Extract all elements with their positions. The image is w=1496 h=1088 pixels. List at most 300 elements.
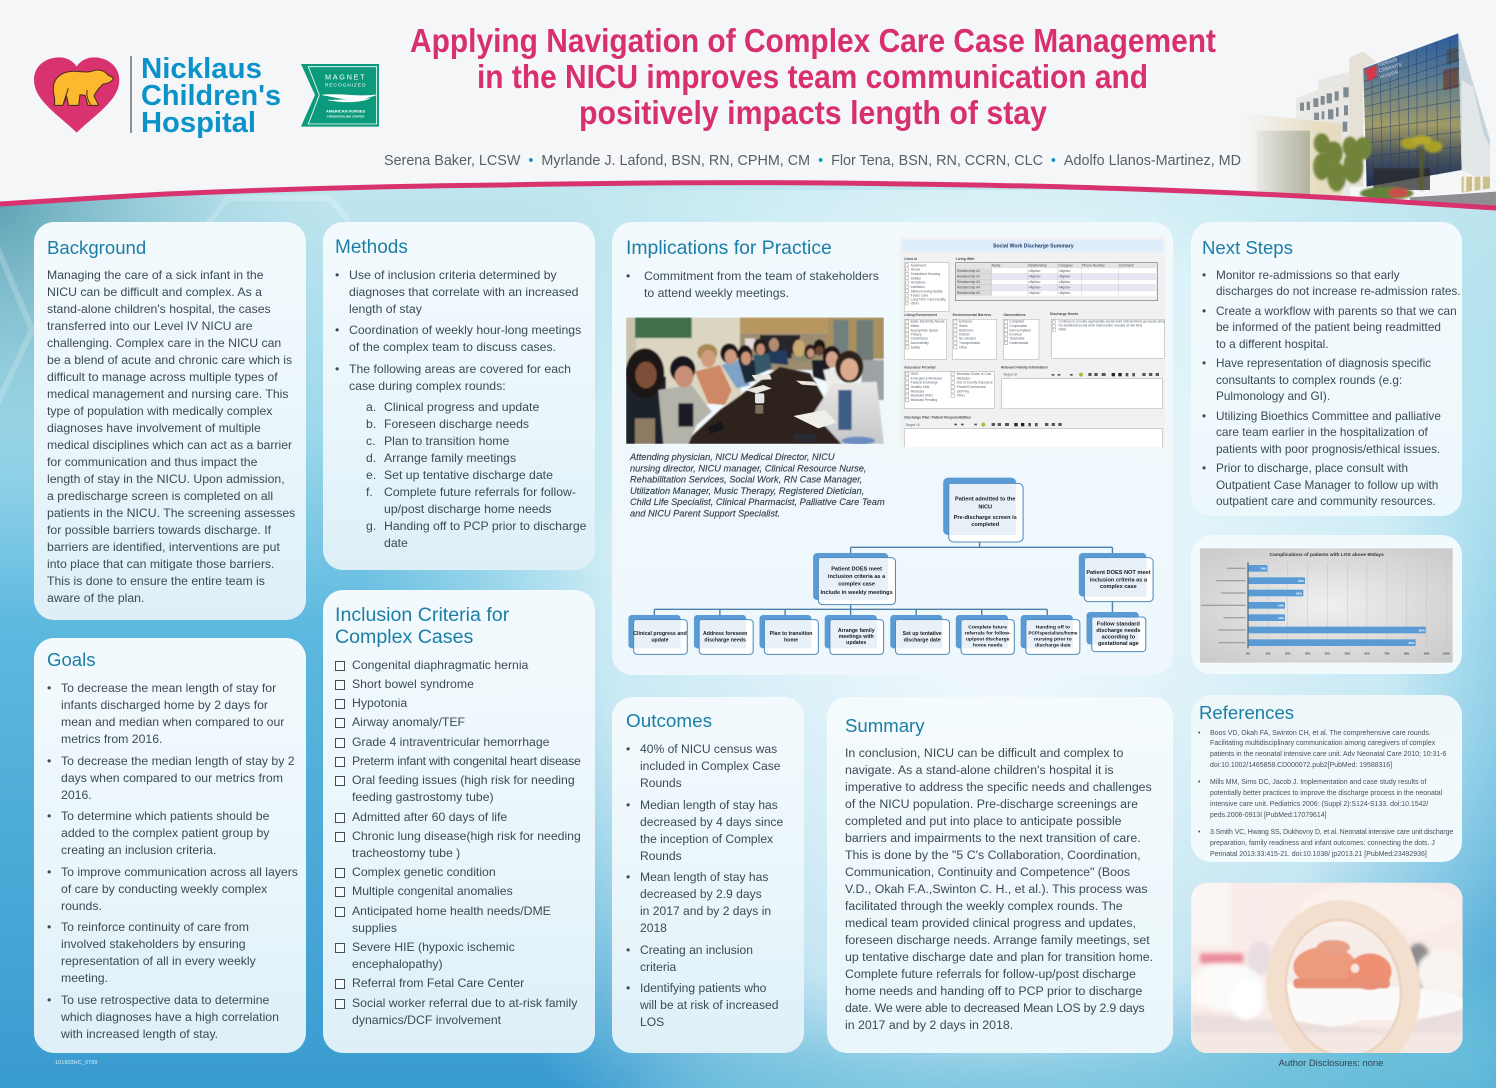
list: methods: c. (366, 434, 376, 448)
checklist: inclusion criteria: Referral from Fetal Care Center (352, 976, 524, 990)
list: next steps: Pulmonology and GI). (1216, 389, 1330, 403)
box: patient admitted: NICU (978, 505, 992, 511)
box: transition home: Plan to transition (770, 631, 812, 637)
screenshot: social work discharge summary form: Transportation (959, 341, 980, 345)
list: references: • (1198, 779, 1200, 786)
list: goals: metrics from 2016. (61, 732, 162, 746)
screenshot: social work discharge summary form: Comment (1119, 264, 1133, 268)
text block: summary: foreseen discharge needs. Arrange family meetings, set (845, 932, 1150, 946)
heading: inclusion criteria (335, 604, 509, 648)
list: next steps: Prior to discharge, place consult with (1216, 461, 1408, 475)
list: goals: To determine which patients should be (61, 809, 269, 823)
photo: team meeting (626, 317, 884, 445)
list: outcomes: Mean length of stay has (640, 870, 768, 884)
list: next steps: Have representation of diagnosis specific (1216, 356, 1431, 370)
box: discharge needs: Address foreseen (703, 631, 747, 637)
caption: team members: Utilization Manager, Music Therapy, Registered Dietician, (630, 486, 864, 496)
screenshot: social work discharge summary form: Relevant Family Information (1001, 366, 1048, 370)
screenshot: social work discharge summary form: <Alpha> (1028, 280, 1041, 284)
bar chart: complications of patients with LOS above 90 days: 70% (1384, 651, 1390, 655)
list: next steps: Outpatient Case Manager to follow up with (1216, 478, 1438, 492)
screenshot: social work discharge summary form: Medicaid HMO (911, 394, 933, 398)
box: meets criteria (813, 553, 895, 605)
screenshot: social work discharge summary form: Cooperative (1009, 324, 1027, 328)
authors: Serena Baker, LCSW • Myrlande J. Lafond, BSN, RN, CPHM, CM • Flor Tena, BSN, RN, CCRN, CLC • Adolfo Llanos-Martinez, MD (384, 152, 1241, 169)
box: future referrals: referrals for follow- (965, 631, 1011, 637)
bar chart: complications of patients with LOS above 90 days: 100% (1443, 651, 1450, 655)
list: methods: date (384, 536, 408, 550)
screenshot: social work discharge summary form: Shelter (911, 276, 922, 280)
text block: background: stand-alone children's hospital, the cases (47, 302, 271, 316)
screenshot: social work discharge summary form: <Alpha> (1058, 286, 1071, 290)
bar chart: complications of patients with LOS above 90 days: 0% (1246, 651, 1251, 655)
text block: summary: date. We were able to decreased Mean LOS by 2.9 days (845, 1000, 1145, 1014)
list: outcomes: Identifying patients who (640, 981, 766, 995)
list: implications: • (626, 268, 630, 282)
list: next steps: discharges do not increase re-admission rates. (1216, 284, 1461, 298)
list: methods: g. (366, 519, 376, 533)
screenshot: social work discharge summary form: <Alpha> (1028, 275, 1041, 279)
logo: Nicklaus Children's Hospital: Hospital (141, 107, 256, 139)
box: discharge needs (694, 615, 753, 654)
text block: summary: Complete future referrals for follow-up/post discharge (845, 966, 1136, 980)
logo: Nicklaus Children's Hospital: Nicklaus (141, 53, 262, 85)
header curve (0, 183, 1496, 208)
box: patient admitted: Patient admitted to the (955, 497, 1015, 503)
list: references: intensive care unit. Pediatrics 2006: (Suppl 2):S124-S133. doi:10.1542/ (1210, 801, 1428, 808)
list: goals: To improve communication across all layers (61, 865, 298, 879)
panel: background (34, 222, 306, 620)
screenshot: social work discharge summary form: Kitchen (959, 332, 970, 336)
box: meets criteria: Patient DOES meet (831, 567, 882, 573)
heading: references: References (1199, 702, 1294, 723)
heading: summary: Summary (845, 715, 925, 736)
box: future referrals (956, 615, 1014, 654)
screenshot: social work discharge summary form: <Alpha> (1058, 291, 1071, 295)
list: goals: of care by conducting weekly complex (61, 882, 267, 896)
list: references: doi:10.1002/1465858.CD000072.pub2[PubMed: 19588316] (1210, 762, 1392, 769)
screenshot: social work discharge summary form: Phone Number (1082, 264, 1106, 268)
list: goals: representation of all in every weekly (61, 954, 256, 968)
list: goals: creating an inclusion criteria. (61, 843, 216, 857)
list: goals: meeting. (61, 971, 108, 985)
bar chart: complications of patients with LOS above 90 days: 19% (1278, 604, 1284, 608)
list: goals: infants discharged home by 2 days for (61, 698, 268, 712)
list: goals: • (47, 809, 51, 823)
title: in the NICU improves team communication and (477, 58, 1148, 95)
text block: background: into place that can mitigate those barriers. (47, 556, 274, 570)
text block: summary: This is done by the "5 C's Collaboration, Coordination, (845, 848, 1141, 862)
screenshot: social work discharge summary form: Medicaid Share of Cost (957, 372, 991, 376)
bar chart: complications of patients with LOS above 90 days: 50% (1345, 651, 1351, 655)
box: transition home: home (784, 637, 798, 643)
list: goals: with increased length of stay. (61, 1027, 218, 1041)
list: methods: Use of inclusion criteria determined by (349, 268, 557, 282)
screenshot: social work discharge summary form: Safety (911, 345, 920, 349)
panel: references (1191, 695, 1462, 862)
checklist: inclusion criteria: tracheostomy tube ) (352, 846, 460, 860)
header band (0, 0, 1496, 210)
box: standard discharge (1087, 612, 1146, 652)
list: goals: days when compared to our metrics from (61, 770, 283, 784)
box: handing off: nursing prior to (1034, 637, 1072, 643)
text block: summary: imperative to address the specific needs and challenges (845, 780, 1152, 794)
text block: background: a predischarge screen is completed on all (47, 488, 273, 502)
checklist: inclusion criteria: Preterm infant with congenital heart disease (352, 754, 581, 768)
list: methods: up/post discharge home needs (384, 502, 552, 516)
caption: team members: and NICU Parent Support Specialist. (630, 508, 780, 518)
list: outcomes: will be at risk of increased (640, 998, 778, 1012)
list: goals: rounds. (61, 899, 102, 913)
list: methods: • (335, 362, 339, 376)
text block: background (47, 268, 295, 604)
bar chart: complications of patients with LOS above 90 days: 30% (1305, 651, 1311, 655)
hospital building photo: Hospital (1379, 69, 1399, 81)
list: methods: a. (366, 400, 376, 414)
text block: summary: medical team provided clinical progress and updates, (845, 916, 1136, 930)
box: meets criteria: complex case (838, 581, 875, 587)
list: implications (626, 268, 879, 300)
heading: background: Background (47, 237, 146, 258)
checklist: inclusion criteria: Multiple congenital anomalies (352, 884, 513, 898)
screenshot: social work discharge summary form: Relationship #2 (957, 275, 980, 279)
text block: summary: facilitated through the weekly complex rounds. The (845, 898, 1123, 912)
screenshot: social work discharge summary form: Apartment (911, 263, 926, 267)
list: outcomes: included in Complex Case (640, 758, 780, 772)
list: outcomes: 2018 (640, 921, 667, 935)
photo: infant in incubator (1191, 882, 1463, 1053)
footer code: 101903HC_0799 (55, 1060, 97, 1066)
list: next steps: • (1202, 408, 1206, 422)
screenshot: social work discharge summary form: Non-compliant (1009, 328, 1031, 332)
list: methods: diagnoses that correlate with an increased (349, 284, 578, 298)
screenshot: social work discharge summary form: Out of County Insurance (957, 381, 993, 385)
list: outcomes (626, 742, 783, 1029)
text block: background: transferred into our Level IV NICU are (47, 318, 253, 332)
panel: inclusion criteria (323, 590, 595, 1053)
title: positively impacts length of stay (579, 94, 1048, 131)
screenshot: social work discharge summary form: <Alpha> (1058, 269, 1071, 273)
graphics: implications (626, 238, 1165, 655)
box: family meetings: updates (846, 640, 866, 646)
box: discharge needs: discharge needs (704, 637, 746, 643)
text block: background: type of population with medically complex (47, 404, 272, 418)
list: next steps: Utilizing Bioethics Committee and palliative (1216, 408, 1441, 422)
screenshot: social work discharge summary form: Relationship #3 (957, 280, 980, 284)
list: outcomes: decreased by 2.9 days (640, 887, 762, 901)
list: next steps: be informed of the patient being readmitted (1216, 320, 1441, 334)
list: methods: b. (366, 417, 376, 431)
list: methods: length of stay (349, 302, 422, 316)
screenshot: social work discharge summary form: Foster Care (911, 294, 928, 298)
screenshot: social work discharge summary form: Medicare (957, 376, 970, 380)
hospital building photo: Nicklaus (1377, 57, 1398, 69)
panel: implications for practice (612, 222, 1173, 675)
text block: summary: up tentative discharge date and plan for transition home. (845, 950, 1153, 964)
checklist: inclusion criteria: Chronic lung disease(high risk for needing (352, 829, 581, 843)
list: outcomes: • (626, 981, 630, 995)
list: references (1198, 730, 1453, 858)
screenshot: social work discharge summary form (900, 237, 1165, 449)
list: goals: added to the complex patient group by (61, 826, 269, 840)
screenshot: social work discharge summary form: Name (992, 264, 1001, 268)
list: outcomes: 40% of NICU census was (640, 742, 777, 756)
checklist: inclusion criteria: Congenital diaphragmatic hernia (352, 658, 528, 672)
checklist: inclusion criteria: Airway anomaly/TEF (352, 715, 465, 729)
caption: team members: Child Life Specialist, Clinical Pharmacist, Palliative Care Team (630, 497, 885, 507)
box: family meetings: meetings with (839, 634, 874, 640)
screenshot: social work discharge summary form: <Alpha> (1028, 269, 1041, 273)
list: goals: 2016. (61, 788, 92, 802)
list: goals: • (47, 993, 51, 1007)
screenshot: social work discharge summary form: Social Work Discharge Summary (993, 244, 1074, 250)
box: standard discharge: discharge needs (1096, 628, 1141, 634)
screenshot: social work discharge summary form: Bathroom (959, 328, 974, 332)
list: outcomes: • (626, 943, 630, 957)
list: goals: To use retrospective data to determine (61, 993, 269, 1007)
bar chart: complications of patients with LOS above 90 days (1200, 548, 1453, 663)
checklist: inclusion criteria: Social worker referral due to at-risk family (352, 996, 577, 1010)
screenshot: social work discharge summary form: Compliant (1009, 320, 1024, 324)
author disclosures: Author Disclosures: none (1279, 1057, 1383, 1068)
panel: complications chart (1191, 535, 1462, 674)
checklist: inclusion criteria: encephalopathy) (352, 957, 443, 971)
screenshot: social work discharge summary form: Private/Commercial (957, 385, 986, 389)
box: handing off (1021, 615, 1080, 654)
box: standard discharge: Follow standard (1097, 622, 1140, 628)
list: next steps: Monitor re-admissions so that early (1216, 268, 1400, 282)
heading: goals: Goals (47, 649, 96, 670)
box: does not meet criteria: complex case (1100, 584, 1137, 590)
list: goals: • (47, 865, 51, 879)
logo: Nicklaus Children's Hospital (34, 53, 281, 139)
screenshot: social work discharge summary form: Long Term Care Facility (911, 298, 946, 302)
screenshot: social work discharge summary form: Emergency Medicaid (911, 376, 942, 380)
screenshot: social work discharge summary form: Environmental Barriers (953, 313, 991, 317)
screenshot: social work discharge summary form: Entrance (959, 320, 972, 324)
text block: background: challenging. Complex care in the NICU can (47, 336, 281, 350)
box: meets criteria: Include in weekly meetings (820, 590, 893, 596)
bar chart: complications of patients with LOS above 90 days: 60% (1364, 651, 1370, 655)
list: next steps (1202, 268, 1461, 508)
screenshot: social work discharge summary form: Living Environment (904, 313, 938, 317)
list: methods: f. (366, 485, 373, 499)
box: standard discharge: gestational age (1098, 641, 1139, 647)
box: patient admitted: Pre-discharge screen is (954, 515, 1017, 521)
screenshot: social work discharge summary form: Federal Exchange (911, 381, 938, 385)
checklist: inclusion criteria: Anticipated home health needs/DME (352, 904, 551, 918)
screenshot: social work discharge summary form: Basic Electricity Needs (911, 320, 945, 324)
text block: summary: of the NICU population. Pre-discharge screenings are (845, 796, 1138, 810)
list: next steps: • (1202, 304, 1206, 318)
flowchart: case pathway (628, 478, 1153, 654)
list: references: Mills MM, Sims DC, Jacob J. Implementation and case study results of (1210, 779, 1426, 786)
screenshot: social work discharge summary form: Other (959, 345, 968, 349)
box: patient admitted: completed (971, 522, 999, 528)
box: future referrals: Complete future (968, 625, 1007, 631)
panel: next steps (1191, 222, 1462, 516)
list: next steps: patients with poor prognosis/ethical issues. (1216, 442, 1440, 456)
icon: Magnet recognized badge: RECOGNIZED (325, 83, 366, 89)
screenshot: social work discharge summary form: Insurance Provider (904, 366, 937, 370)
screenshot: social work discharge summary form: Understands (1009, 341, 1029, 345)
screenshot: social work discharge summary form: No elevator (959, 337, 977, 341)
box: transition home (759, 615, 818, 654)
list: outcomes: Creating an inclusion (640, 943, 753, 957)
box: clinical progress: Clinical progress and (633, 631, 687, 637)
panel: summary (827, 697, 1173, 1053)
text block: background: This is done to ensure the entire team is (47, 574, 265, 588)
list: outcomes: criteria (640, 960, 676, 974)
screenshot: social work discharge summary form: House (911, 268, 920, 272)
box: tentative discharge: discharge date (904, 637, 941, 643)
list: methods: Arrange family meetings (384, 451, 516, 465)
list: outcomes: Median length of stay has (640, 798, 778, 812)
panel: goals (34, 638, 306, 1053)
screenshot: social work discharge summary form: Teachable (1009, 337, 1025, 341)
box: does not meet criteria: inclusion criteria as a (1090, 577, 1148, 583)
screenshot: social work discharge summary form: Other (911, 302, 920, 306)
box: does not meet criteria (1079, 553, 1153, 602)
list: references: potentially better practices to improve the discharge process in the neonatal (1210, 790, 1442, 797)
screenshot: social work discharge summary form: Homeless (911, 281, 926, 285)
bar chart: complications of patients with LOS above 90 days: 10% (1260, 567, 1267, 571)
box: handing off: Handing off to (1036, 625, 1070, 631)
text block: background: difficult to manage across multiple types of (47, 370, 278, 384)
heading: methods: Methods (335, 237, 408, 258)
screenshot: social work discharge summary form: Lives In (904, 257, 917, 261)
list: outcomes: the inception of Complex (640, 832, 773, 846)
checklist: inclusion criteria: dynamics/DCF involvement (352, 1013, 501, 1027)
screenshot: social work discharge summary form: Stairs (959, 324, 968, 328)
screenshot: social work discharge summary form: Cleanliness (911, 337, 928, 341)
screenshot: social work discharge summary form: <Alpha> (1058, 275, 1071, 279)
text block: summary (845, 746, 1153, 1032)
screenshot: social work discharge summary form: Discharge Plan: Patient Responsibilities (904, 416, 971, 420)
bar chart: complications of patients with LOS above 90 days: 20% (1285, 651, 1291, 655)
list: next steps: • (1202, 268, 1206, 282)
screenshot: social work discharge summary form: <Alpha> (1058, 280, 1071, 284)
list: methods: Complete future referrals for follow- (384, 485, 576, 499)
screenshot: social work discharge summary form: Involved (1009, 332, 1022, 336)
screenshot: social work discharge summary form: HMO (911, 372, 919, 376)
list: next steps: outpatient care and community resources. (1216, 494, 1436, 508)
screenshot: social work discharge summary form: Self Pay (957, 389, 969, 393)
list: methods: • (335, 268, 339, 282)
screenshot: social work discharge summary form: Relationship #1 (957, 269, 980, 273)
screenshot: social work discharge summary form: Living With (956, 257, 974, 261)
heading: inclusion criteria: Complex Cases (335, 626, 473, 648)
text block: background: for communication and thus impact the (47, 454, 257, 468)
box: tentative discharge (890, 615, 949, 654)
heading: implications: Implications for Practice (626, 237, 832, 259)
list: goals: which diagnoses have a high correlation (61, 1010, 279, 1024)
box: handing off: PCP/specialists/home (1028, 631, 1078, 636)
list: methods: Set up tentative discharge date (384, 468, 553, 482)
checklist: inclusion criteria (335, 658, 581, 1027)
list: goals: To decrease the mean length of stay for (61, 680, 276, 694)
list: methods: case during complex rounds: (349, 379, 506, 393)
bar chart: complications of patients with LOS above 90 days: 28% (1296, 591, 1302, 595)
text block: summary: home needs and handing off to PCP prior to discharge (845, 984, 1142, 998)
text block: background: length of stay in the NICU. Upon admission, (47, 472, 285, 486)
list: goals: To reinforce continuity of care from (61, 920, 249, 934)
list: next steps: to a different hospital. (1216, 336, 1329, 350)
text block: summary: in 2017 and by 2 days in 2018. (845, 1018, 1013, 1032)
list: references: 3.Smith VC, Hwang SS, Dukhovny D, et al. Neonatal intensive care unit discharge (1210, 829, 1453, 836)
checklist: inclusion criteria: feeding gastrostomy tube) (352, 790, 494, 804)
screenshot: social work discharge summary form: Relationship #4 (957, 286, 980, 290)
screenshot: social work discharge summary form: Observations (1003, 313, 1026, 317)
bar chart: complications of patients with LOS above 90 days: 40% (1325, 651, 1331, 655)
list: methods: d. (366, 451, 376, 465)
box: clinical progress: update (651, 637, 669, 643)
box: clinical progress (628, 615, 687, 654)
box: standard discharge: according to (1102, 634, 1136, 640)
screenshot: social work discharge summary form: <Alpha> (1028, 286, 1041, 290)
title (410, 22, 1216, 131)
screenshot: social work discharge summary form: Continue to provide appropriate social work interventions as needs arise (1058, 319, 1165, 323)
bar chart: complications of patients with LOS above 90 days: 10% (1265, 651, 1271, 655)
list: outcomes: in 2017 and by 2 days in (640, 904, 771, 918)
panel: methods (323, 222, 595, 570)
list: methods: Plan to transition home (384, 434, 509, 448)
list: methods: of the complex team to discuss cases. (349, 340, 556, 354)
list: outcomes: Rounds (640, 776, 682, 790)
checklist: inclusion criteria: Grade 4 intraventricular hemorrhage (352, 735, 549, 749)
list: next steps: consultants to complex rounds (e.g: (1216, 372, 1402, 386)
box: family meetings (825, 615, 884, 654)
heading: next steps: Next Steps (1202, 237, 1293, 258)
list: goals: • (47, 754, 51, 768)
box: family meetings: Arrange family (838, 628, 875, 634)
screenshot: social work discharge summary form: Subsidized Housing (911, 272, 940, 276)
box: patient admitted (943, 478, 1023, 542)
text block: summary: completed and put into place to anticipate possible (845, 814, 1122, 828)
list: implications: Commitment from the team of stakeholders (644, 268, 879, 282)
icon: Magnet recognized badge: AMERICAN NURSES (326, 108, 366, 113)
screenshot: social work discharge summary form: Discharge Needs (1050, 312, 1078, 316)
checklist: inclusion criteria: Short bowel syndrome (352, 677, 474, 691)
heading: inclusion criteria: Inclusion Criteria for (335, 604, 509, 626)
box: handing off: discharge date (1035, 643, 1071, 649)
screenshot: social work discharge summary form: Water (911, 324, 920, 328)
heading: outcomes: Outcomes (626, 711, 712, 732)
screenshot: social work discharge summary form: <Alpha> (1028, 291, 1041, 295)
list: references: preparation, family readiness and infant outcomes: connecting the dots. J (1210, 840, 1435, 847)
list: goals: • (47, 680, 51, 694)
bar chart: complications of patients with LOS above 90 days: 80% (1404, 651, 1410, 655)
checklist: inclusion criteria: Severe HIE (hypoxic ischemic (352, 940, 515, 954)
list: methods: Handing off to PCP prior to discharge (384, 519, 586, 533)
screenshot: social work discharge summary form: Skilled nursing facility (911, 289, 943, 293)
text block: summary: V.D., Okah F.A.,Swinton C. H., et al.). This process was (845, 882, 1148, 896)
logo: Nicklaus Children's Hospital: Children's (141, 80, 281, 112)
hospital building photo: Children's (1378, 61, 1403, 75)
screenshot: social work discharge summary form: Relationship (1028, 264, 1047, 268)
screenshot: social work discharge summary form: Other (1058, 328, 1068, 332)
text block: summary: barriers and impairments to the next transition of care. (845, 830, 1141, 844)
text block: summary: Communication, Continuity and Competence" (Boos (845, 864, 1130, 878)
checklist: inclusion criteria: Complex genetic condition (352, 865, 496, 879)
box: tentative discharge: Set up tentative (903, 631, 942, 637)
screenshot: social work discharge summary form: Privacy (911, 332, 922, 336)
list: outcomes: • (626, 798, 630, 812)
screenshot: social work discharge summary form: Other (957, 394, 966, 398)
checklist: inclusion criteria: Hypotonia (352, 696, 407, 710)
icon: Magnet recognized badge: MAGNET (325, 72, 366, 81)
text block: background: diagnoses have involvement of multiple (47, 420, 261, 434)
